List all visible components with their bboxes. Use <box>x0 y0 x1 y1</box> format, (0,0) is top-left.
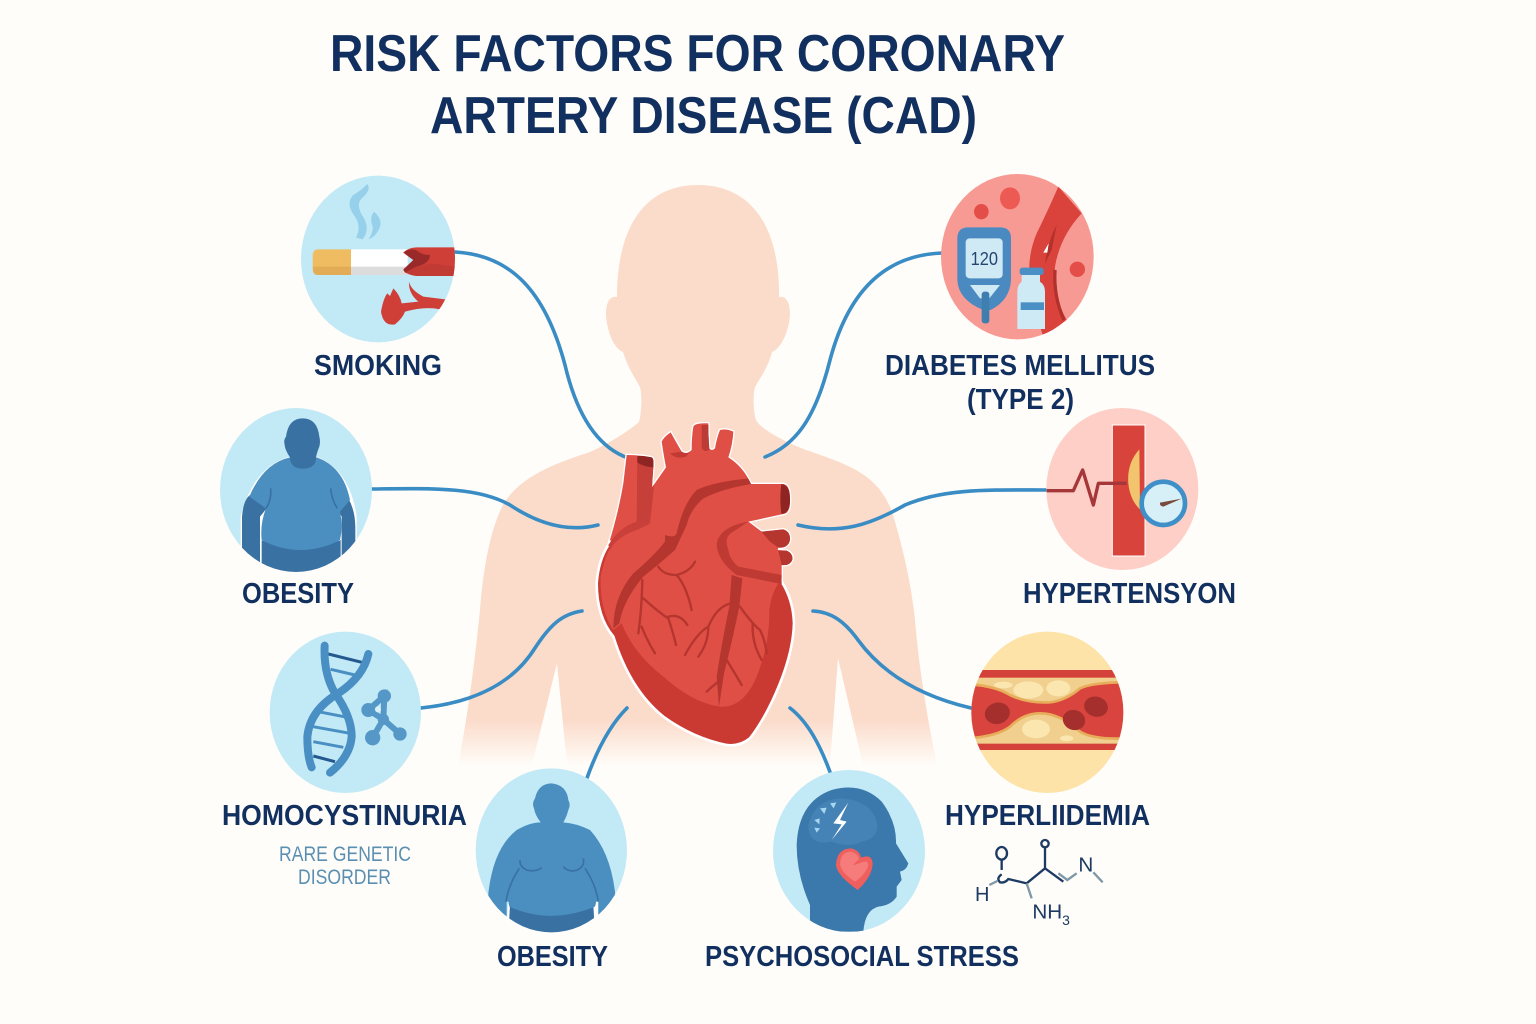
icon: hyperlipidemia artery circle <box>967 632 1127 793</box>
label: obesity bottom: OBESITY <box>497 941 608 973</box>
label: smoking: SMOKING <box>314 350 442 382</box>
chemical structure <box>975 840 1103 928</box>
connector: obesity left <box>372 489 598 528</box>
lightning bolt <box>832 803 848 840</box>
infographic canvas <box>220 34 1234 966</box>
title <box>330 25 1065 145</box>
body silhouette <box>458 185 937 765</box>
vial <box>1017 275 1045 329</box>
label: hyperlipidemia: HYPERLIIDEMIA <box>945 800 1150 832</box>
icon: hypertension circle <box>1046 408 1198 570</box>
icon: psychosocial stress circle <box>773 770 925 932</box>
label: diabetes mellitus: DIABETES MELLITUS <box>885 350 1155 382</box>
icon: diabetes circle: 120 <box>971 248 998 269</box>
small heart <box>836 848 873 890</box>
connector: psychosocial stress <box>790 708 830 772</box>
cigarette <box>313 247 457 325</box>
connector: diabetes <box>765 253 942 457</box>
connector: hyperlipidemia <box>813 611 971 708</box>
heart illustration <box>595 422 796 746</box>
label: psychosocial stress: PSYCHOSOCIAL STRESS <box>705 941 1019 973</box>
artery <box>1029 187 1082 337</box>
label: homocystinuria <box>222 800 467 889</box>
connector: obesity bottom <box>587 708 627 778</box>
icon: diabetes circle <box>941 174 1094 339</box>
chemical structure: H <box>975 884 989 906</box>
heart shading and vessels <box>600 423 792 707</box>
label: diabetes mellitus <box>885 350 1155 416</box>
label: homocystinuria: DISORDER <box>298 866 391 889</box>
label: homocystinuria: HOMOCYSTINURIA <box>222 800 467 832</box>
chemical structure: NH <box>1032 900 1062 923</box>
label: homocystinuria: RARE GENETIC <box>279 843 411 866</box>
chemical structure: N <box>1078 854 1093 877</box>
title: ARTERY DISEASE (CAD) <box>430 87 977 145</box>
chemical structure: 3 <box>1062 912 1070 928</box>
label: obesity left: OBESITY <box>242 578 354 610</box>
title: RISK FACTORS FOR CORONARY <box>330 25 1065 83</box>
icon: obesity bottom circle <box>476 768 627 935</box>
icon: smoking circle <box>301 176 457 342</box>
smoke <box>350 184 381 239</box>
icon: DNA and molecule circle <box>270 632 421 793</box>
connector: smoking <box>455 252 628 458</box>
label: diabetes mellitus: (TYPE 2) <box>967 384 1074 416</box>
icon: obesity left circle <box>220 408 372 577</box>
label: hypertension: HYPERTENSYON <box>1023 578 1236 610</box>
molecule <box>361 689 407 745</box>
stress sparks <box>814 802 836 833</box>
connector: homocystinuria <box>421 611 582 708</box>
connector: hypertension <box>798 490 1048 529</box>
glucose meter <box>957 227 1011 310</box>
